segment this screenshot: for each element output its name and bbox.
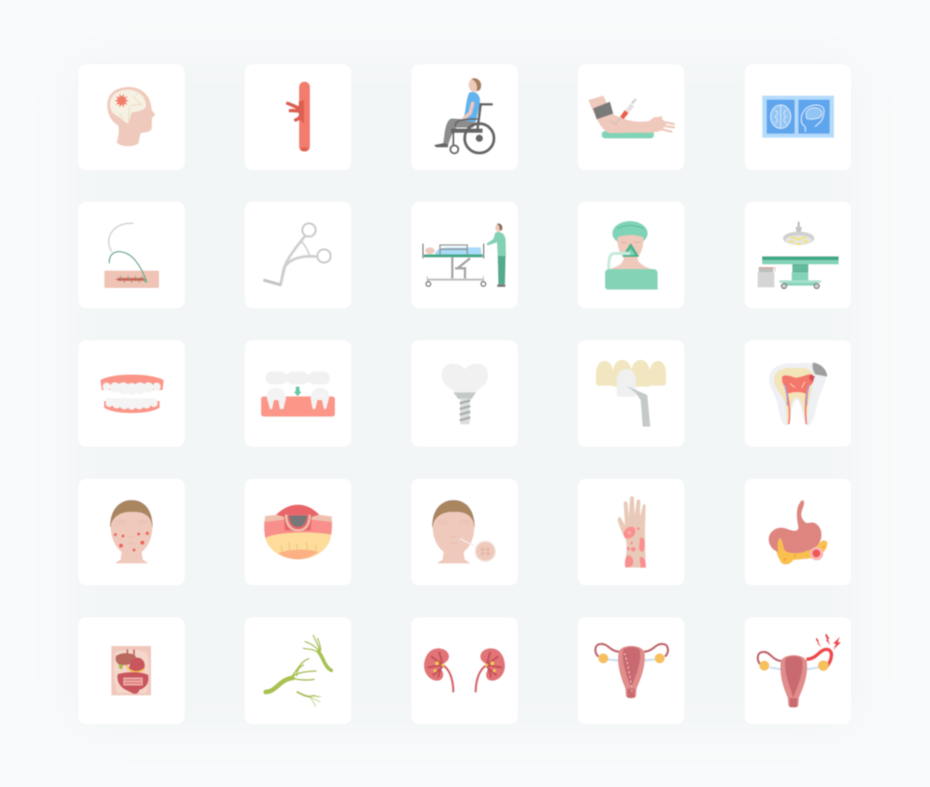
icon: uterus with inflamed tube xyxy=(758,633,841,708)
icon: face with red spots xyxy=(110,500,153,563)
panel: forceps xyxy=(244,202,352,308)
panel: face with skin detail xyxy=(411,478,518,586)
panel: skin layers xyxy=(244,478,352,586)
icon: hand with rash patches xyxy=(618,496,646,568)
icon: implant crown and screw xyxy=(442,364,488,424)
panel: uterus xyxy=(578,617,684,724)
panel: bacteria xyxy=(244,617,352,724)
icon: skin cross-section with pore xyxy=(264,505,332,559)
icon: veneer with tweezers xyxy=(596,360,666,427)
icon: uterus and ovaries xyxy=(595,644,668,698)
icon: person in wheelchair xyxy=(434,78,494,153)
panel: stomach and pancreas xyxy=(744,478,852,586)
icon: surgical forceps xyxy=(263,223,331,285)
icon: denture set xyxy=(100,374,164,413)
panel: brain scans xyxy=(744,64,852,170)
panel: hospital bed xyxy=(411,202,518,308)
icon: abdominal organs xyxy=(111,646,151,695)
panel: brain stroke xyxy=(78,64,185,170)
panel: acne face xyxy=(78,478,185,586)
panel: skin rash on hand xyxy=(578,478,684,586)
panel: suture xyxy=(78,202,185,308)
icon: arm with cuff and syringe xyxy=(588,96,674,138)
panel: tooth anatomy xyxy=(744,340,852,447)
icon: tooth cross-section xyxy=(769,362,827,426)
panel: dental bridge xyxy=(244,340,352,447)
icon: pair of kidneys xyxy=(424,648,505,692)
icon: stomach with inflamed pancreas xyxy=(769,500,827,565)
panel: dentures xyxy=(78,340,185,447)
panel: uterus with pain xyxy=(744,617,852,724)
icon: nurse and patient on stretcher xyxy=(423,223,506,287)
panel: wheelchair xyxy=(411,64,518,170)
panel: artery xyxy=(244,64,352,170)
panel: kidneys xyxy=(411,617,518,724)
icon: MRI scan film xyxy=(762,96,834,138)
panel: anesthesia xyxy=(578,202,684,308)
panel: digestive organs xyxy=(78,617,185,724)
icon: head with brain lesion xyxy=(107,87,155,146)
panel: operating room xyxy=(744,202,852,308)
icon: operating table and lamp xyxy=(758,222,839,289)
icon: patient with oxygen mask xyxy=(605,221,658,290)
icon: bridge over gums xyxy=(261,372,335,417)
icon: face with magnified wrinkle xyxy=(432,500,498,564)
icon: helicobacter bacteria xyxy=(266,635,331,707)
icon: needle and stitched wound xyxy=(104,223,159,288)
panel: veneers xyxy=(578,340,684,447)
panel: dental implant xyxy=(411,340,518,447)
icon: ruptured artery xyxy=(288,82,310,152)
panel: blood pressure xyxy=(578,64,684,170)
